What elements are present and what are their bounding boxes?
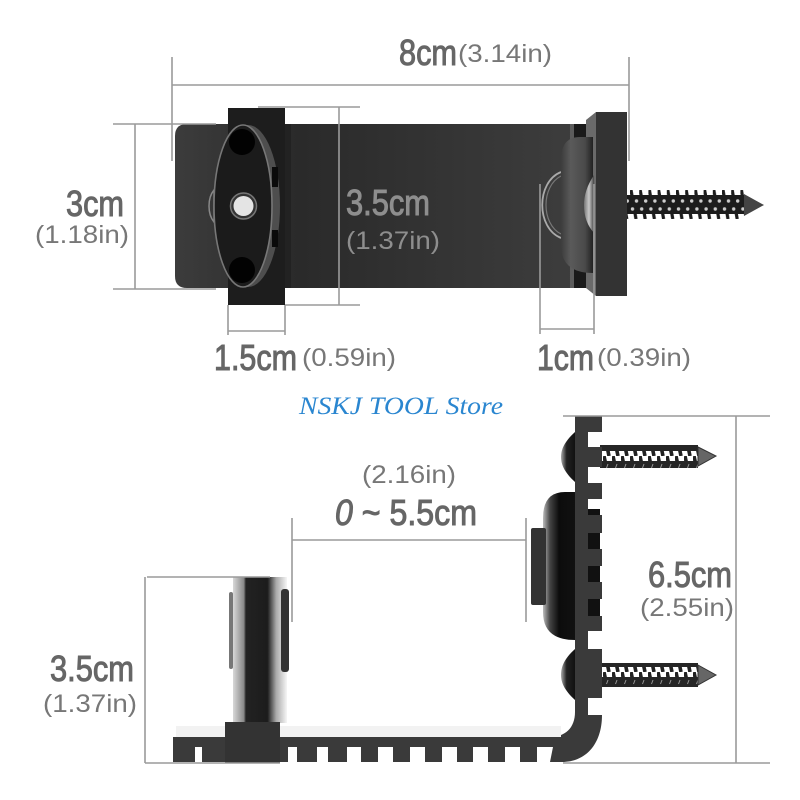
label: 0 ~ 5.5cm: (2.16in) [362, 461, 456, 489]
label: 6.5cm [640, 554, 734, 622]
label: 8cm: 8cm [399, 32, 457, 73]
side view: L bracket [173, 416, 602, 762]
label: 6.5cm: (2.55in) [640, 594, 734, 622]
label: 3.5cm side: 3.5cm [50, 648, 134, 689]
label: 1cm: (0.39in) [597, 344, 691, 372]
dimension lines: side view [145, 416, 770, 763]
label: 0 ~ 5.5cm: 0 ~ 5.5cm [335, 492, 477, 533]
icon: oval slider knob [209, 125, 280, 287]
label: 3.5cm on plate: 3.5cm [346, 182, 430, 223]
dimension lines: top view [113, 57, 629, 335]
side view: clamp knob [531, 492, 575, 640]
side view: screw heads [561, 432, 575, 700]
top view: bracket plate [175, 124, 590, 288]
side view: floor highlight [176, 726, 561, 737]
label: 6.5cm: 6.5cm [648, 554, 732, 595]
label: 3.5cm on plate: (1.37in) [346, 227, 440, 255]
top view: sliding clamp block [209, 108, 291, 305]
side view: centre notches [588, 509, 600, 616]
side view: slider post [225, 577, 289, 763]
label: 1.5cm [214, 337, 396, 378]
label: 1.5cm: 1.5cm [214, 337, 297, 378]
label: 3.5cm side: (1.37in) [43, 690, 137, 718]
label: 3cm [35, 183, 129, 249]
label: 3cm: 3cm [66, 183, 124, 224]
label: 1cm [537, 337, 691, 378]
label: 8cm: (3.14in) [458, 40, 552, 68]
store name: NSKJ TOOL Store [298, 393, 503, 420]
label: 8cm [399, 32, 552, 73]
label: 3cm: (1.18in) [35, 221, 129, 249]
label: 0 ~ 5.5cm [335, 461, 477, 533]
side view: screws [600, 445, 716, 687]
label: 3.5cm on plate [346, 182, 440, 255]
label: 3.5cm side [43, 648, 137, 718]
top view: screw [627, 190, 764, 219]
label: 1.5cm: (0.59in) [302, 344, 396, 372]
label: 1cm: 1cm [537, 337, 594, 378]
top view: right end plate with knob [542, 112, 627, 296]
